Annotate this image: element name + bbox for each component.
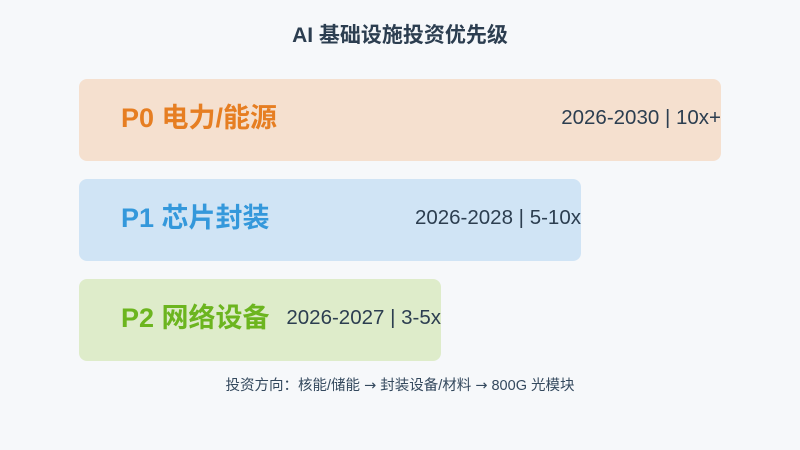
value: P2: 2026-2027 | 3-5x: [286, 306, 441, 329]
value: P1: 2026-2028 | 5-10x: [415, 206, 581, 229]
title: AI 基础设施投资优先级: [292, 24, 508, 47]
bar: P0: [79, 79, 721, 161]
bar: P1: [79, 179, 581, 261]
label: P0: P0 电力/能源: [121, 103, 277, 133]
label: P1: P1 芯片封装: [121, 203, 270, 233]
footer note: 投资方向：核能/储能 → 封装设备/材料 → 800G 光模块: [226, 378, 574, 394]
label: P2: P2 网络设备: [121, 303, 270, 333]
bar: P2: [79, 279, 441, 361]
value: P0: 2026-2030 | 10x+: [561, 106, 721, 129]
